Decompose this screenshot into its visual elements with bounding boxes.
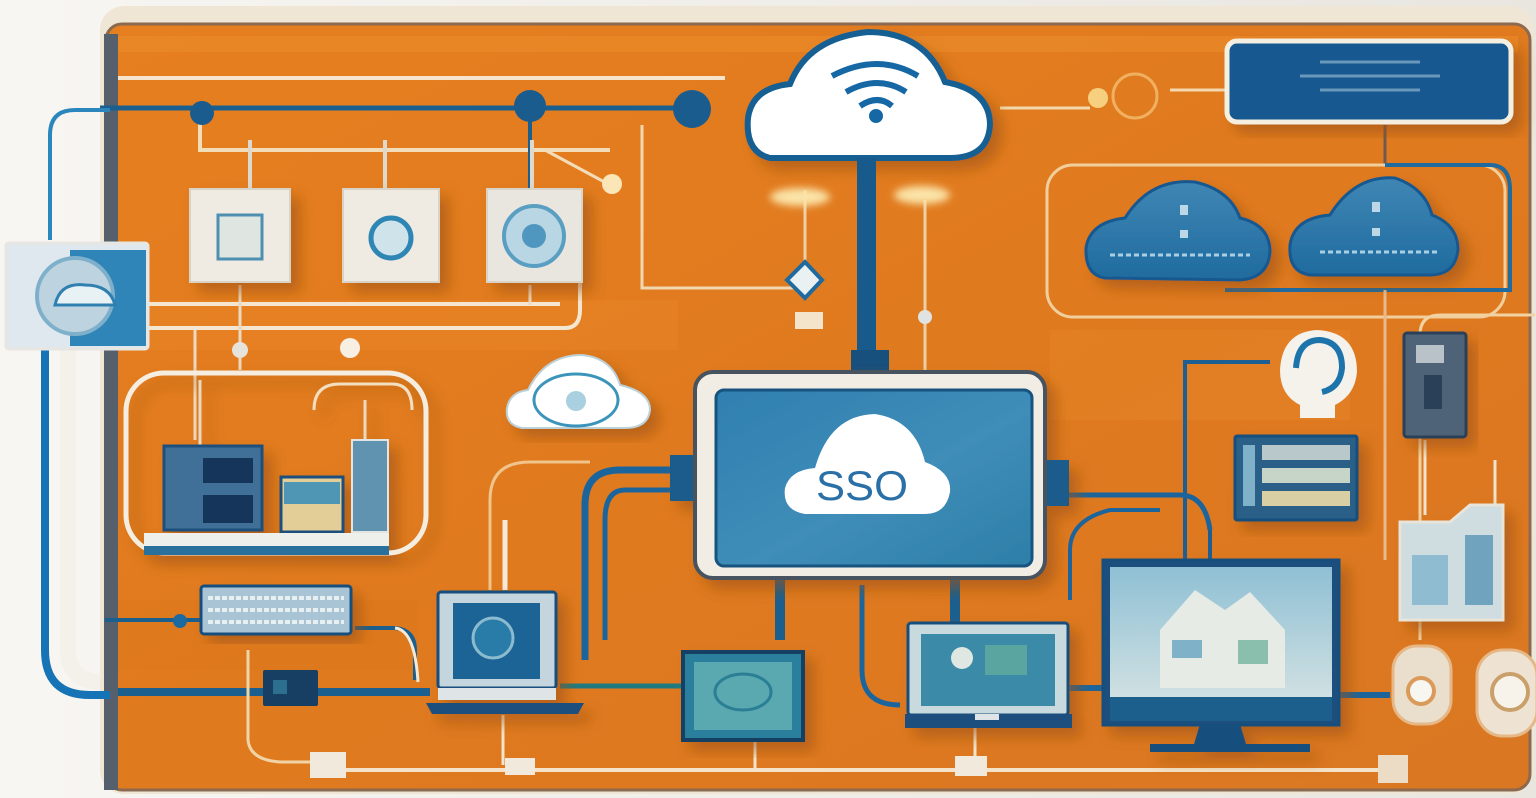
panel: left tablet <box>6 243 148 349</box>
icon: document stack <box>1400 505 1503 620</box>
icon: gear badges <box>1393 646 1536 736</box>
connector nodes <box>173 74 1157 628</box>
callout: top right label box <box>1227 41 1511 122</box>
icon: server rack list <box>1235 436 1357 520</box>
panel: two blue clouds <box>1086 178 1458 280</box>
cloud: SSO badge <box>785 414 950 514</box>
icon: bottom connector chips <box>310 752 1408 783</box>
cloud: small white cloud <box>507 355 650 428</box>
cloud: main wifi cloud <box>748 32 990 158</box>
panel: central SSO screen <box>670 372 1069 578</box>
icon: right device <box>1404 333 1466 437</box>
icon: small tablet <box>683 652 803 740</box>
icon: small switch box <box>263 670 318 706</box>
icon: lightbulb marker <box>1280 330 1357 418</box>
icon: keyboard <box>201 586 351 634</box>
icon: wifi signal <box>832 64 918 120</box>
cloud mast to main screen <box>851 158 889 374</box>
icon: glowing signals under cloud <box>770 186 950 329</box>
icon: laptop left <box>426 592 584 714</box>
icon: laptop center <box>905 623 1072 728</box>
panel: rounded workstation frame <box>126 373 426 555</box>
icon: desktop monitor <box>1103 560 1339 752</box>
panel: three device cards <box>190 189 582 282</box>
cloud: SSO badge: SSO <box>816 462 908 509</box>
